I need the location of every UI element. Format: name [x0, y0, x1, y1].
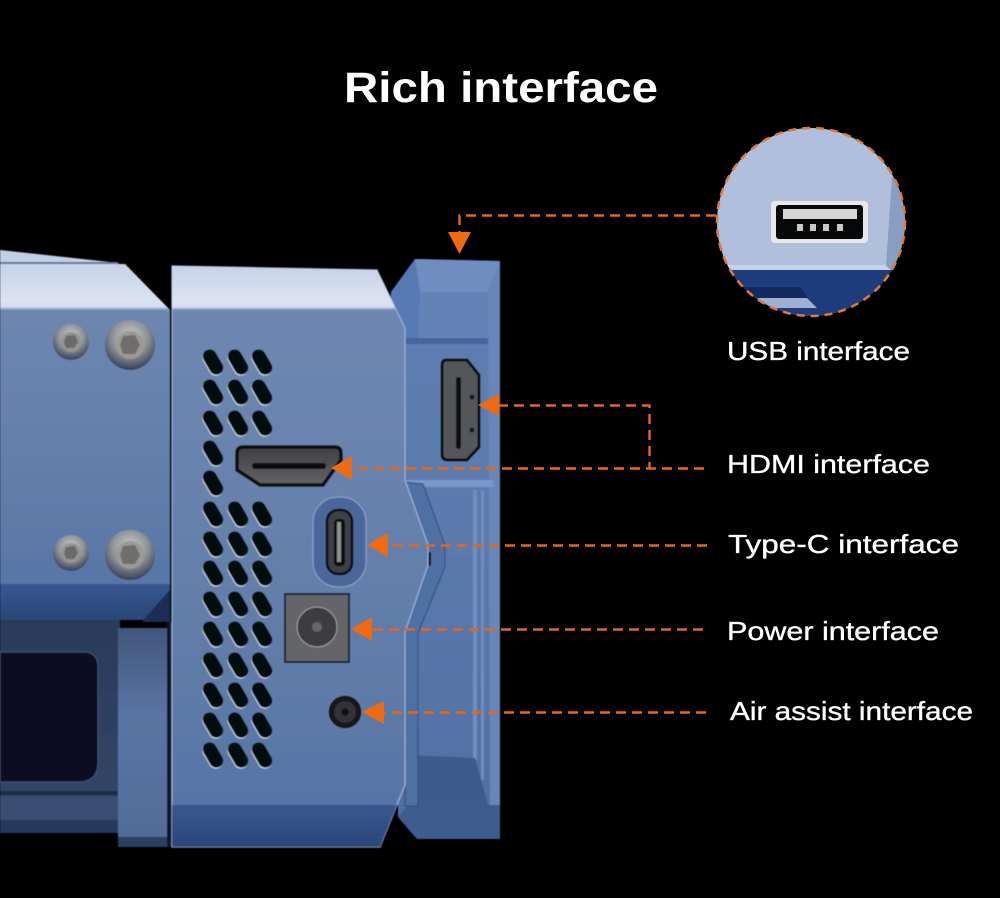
label: Power interface: Power interface: [727, 616, 939, 646]
side seam: [405, 482, 445, 806]
USB zoom lens: [716, 127, 906, 320]
port: Type-C: [313, 497, 366, 587]
port: air assist: [328, 695, 362, 729]
arrow: power: [351, 617, 703, 641]
device: right module: [390, 259, 500, 839]
label: Type-C interface: Type-C interface: [728, 529, 959, 559]
device: left panel: [0, 250, 172, 847]
vent slots: [200, 347, 275, 771]
arrow: USB: [448, 216, 716, 254]
pillar: [118, 628, 167, 847]
screws: [53, 324, 89, 360]
label: Air assist interface: Air assist interface: [730, 696, 973, 726]
label: HDMI interface: HDMI interface: [727, 449, 930, 479]
port: vertical HDMI: [442, 360, 479, 460]
device illustration: [0, 250, 500, 847]
port: horizontal HDMI: [237, 447, 341, 485]
label: USB interface: USB interface: [727, 336, 910, 366]
window: [0, 652, 98, 782]
arrow: HDMI (two ports): [331, 394, 704, 480]
port: power: [285, 594, 349, 662]
arrow: Type-C: [367, 533, 707, 557]
foot: [408, 755, 488, 805]
icon: USB port: [771, 201, 868, 243]
title: Rich interface: [344, 64, 658, 112]
device: middle panel: [172, 266, 428, 847]
arrow: air assist: [362, 701, 706, 724]
